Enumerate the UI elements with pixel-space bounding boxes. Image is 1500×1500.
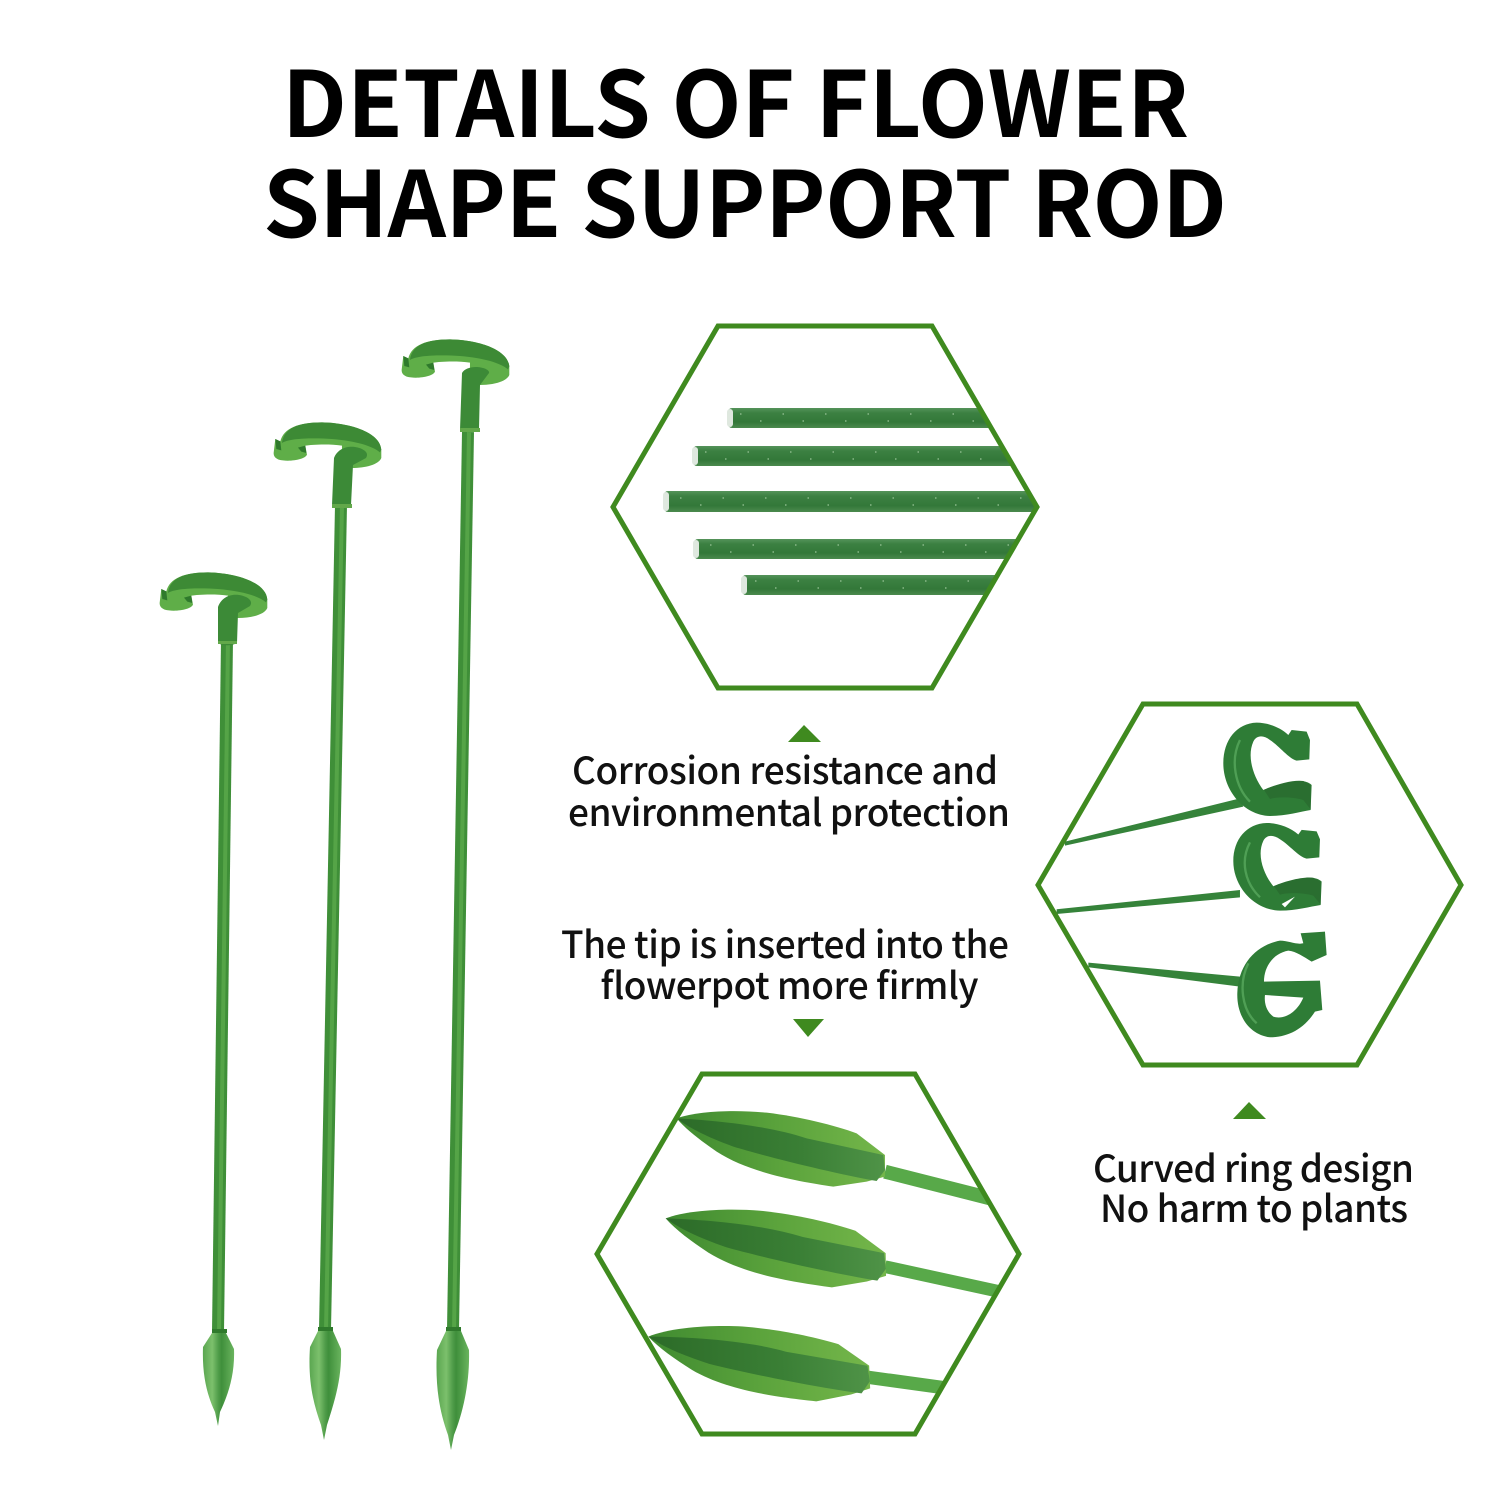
text: corrosion resistance: environmental protection: [568, 783, 1010, 837]
text: curved ring design: Curved ring design: [1093, 1139, 1414, 1193]
hexagon: spear tips: [597, 1074, 1019, 1434]
text: tip insertion: [561, 915, 1009, 1010]
title: SHAPE SUPPORT ROD: [263, 132, 1227, 264]
medium support rod: [274, 422, 381, 1440]
text: tip insertion: The tip is inserted into the: [561, 915, 1009, 969]
hexagon: curved rings: [1038, 704, 1461, 1065]
text: curved ring design: No harm to plants: [1100, 1179, 1408, 1233]
short support rod: [160, 572, 267, 1426]
arrow up: corrosion caption: [788, 725, 821, 742]
title: DETAILS OF FLOWER: [282, 32, 1189, 164]
title: [263, 32, 1227, 264]
text: corrosion resistance: [568, 741, 1010, 837]
text: tip insertion: flowerpot more firmly: [601, 956, 979, 1010]
tall support rod: [402, 339, 509, 1450]
arrow up: curved ring caption: [1233, 1102, 1266, 1119]
arrow down: tip caption: [793, 1019, 824, 1037]
text: corrosion resistance: Corrosion resistance and: [572, 741, 998, 795]
hexagon: rod surface detail: [613, 326, 1044, 688]
text: curved ring design: [1093, 1139, 1414, 1233]
